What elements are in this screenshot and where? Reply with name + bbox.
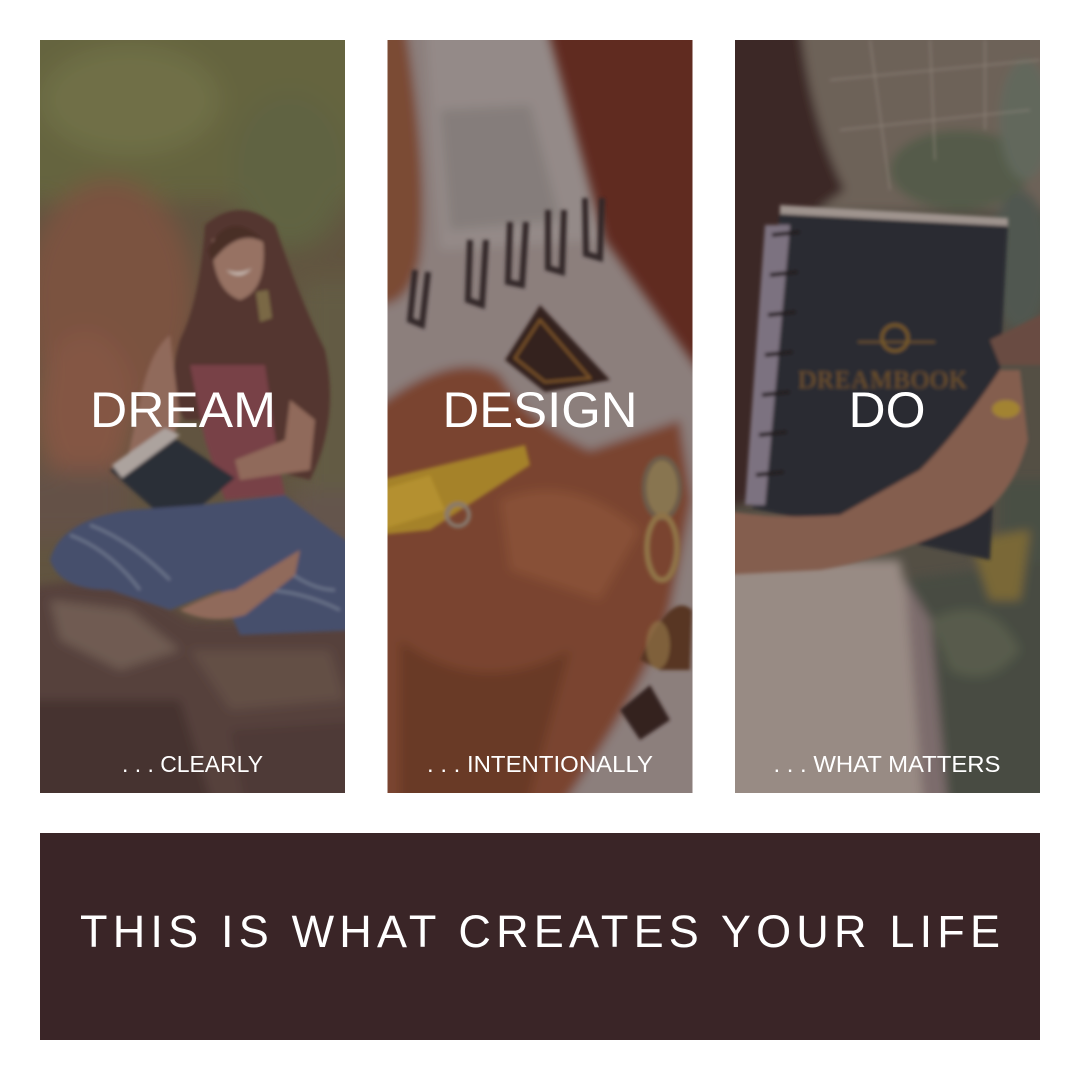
leaves lower — [916, 574, 1040, 793]
panel: design photo — [388, 40, 692, 793]
rock — [40, 582, 345, 793]
foot — [180, 550, 300, 619]
face — [212, 231, 264, 300]
hair back — [174, 210, 330, 480]
hair — [735, 40, 846, 509]
heading: DO: DO — [848, 382, 926, 438]
arm — [720, 370, 1028, 575]
notebook gold title — [798, 325, 968, 394]
heading: DESIGN: DESIGN — [442, 382, 638, 438]
stickers — [505, 305, 610, 392]
caption: clearly: . . . CLEARLY — [122, 751, 263, 777]
pen — [380, 445, 530, 535]
rings — [644, 458, 680, 518]
heading: DREAM: DREAM — [90, 382, 276, 438]
notebook — [109, 439, 235, 510]
caption: intentionally: . . . INTENTIONALLY — [427, 751, 653, 777]
hand — [388, 362, 692, 793]
caption: what matters: . . . WHAT MATTERS — [774, 751, 1000, 777]
banner text: THIS IS WHAT CREATES YOUR LIFE — [80, 906, 1000, 957]
panel: dream photo — [40, 40, 345, 793]
notebook gold title: DREAMBOOK — [798, 367, 968, 394]
notebook page — [388, 40, 692, 793]
banner — [40, 833, 1040, 1040]
dress — [735, 554, 928, 793]
panel: do photo — [735, 40, 1040, 793]
spiral rings — [410, 198, 602, 325]
jeans — [50, 495, 360, 635]
grid wire — [830, 40, 1040, 190]
thumb top-left — [388, 40, 428, 308]
notebook — [752, 208, 1008, 560]
body — [128, 336, 182, 453]
